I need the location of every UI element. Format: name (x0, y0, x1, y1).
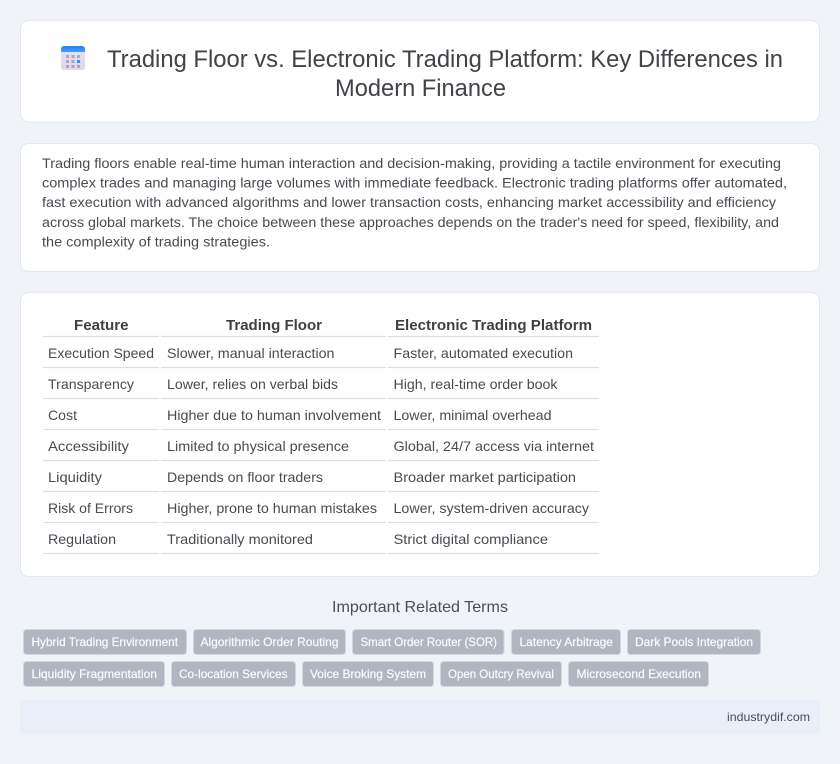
row: transparency (48, 376, 559, 392)
row: execution speed: Slower, manual interaction (167, 345, 334, 361)
row: cost (48, 407, 552, 423)
tag: Latency Arbitrage (520, 635, 613, 649)
row: regulation: Regulation (48, 531, 116, 547)
tag: Hybrid Trading Environment (32, 635, 179, 649)
row: transparency: Transparency (48, 376, 134, 392)
tag (568, 662, 708, 686)
row: accessibility (48, 438, 594, 454)
tag (628, 630, 760, 654)
row: liquidity: Liquidity (48, 469, 102, 485)
tag: Microsecond Execution (576, 667, 701, 681)
row: execution speed: Execution Speed (48, 345, 154, 361)
panel: summary (20, 144, 820, 272)
tag (440, 662, 562, 686)
tag: Smart Order Router (SOR) (360, 635, 497, 649)
title: Modern Finance (335, 75, 506, 102)
summary text (42, 155, 787, 249)
row: liquidity: Broader market participation (394, 469, 576, 485)
title (107, 46, 783, 102)
table header: Electronic Trading Platform (395, 318, 592, 334)
heading: related terms: Important Related Terms (332, 599, 508, 616)
tag (194, 630, 346, 654)
tag (24, 662, 164, 686)
tag (172, 662, 296, 686)
summary text: the complexity of trading strategies. (42, 233, 270, 249)
tag: Algorithmic Order Routing (200, 635, 338, 649)
icon: calendar (61, 46, 85, 70)
row: transparency: High, real-time order book (394, 376, 559, 392)
tag: Dark Pools Integration (635, 635, 753, 649)
footer (20, 700, 820, 734)
panel: header (20, 20, 820, 122)
row: risk of errors (48, 500, 589, 516)
tag: Open Outcry Revival (448, 667, 554, 681)
row: liquidity (48, 469, 576, 485)
summary text: complex trades and managing large volumes with immediate feedback. Electronic trading platforms offer automated, (42, 175, 787, 191)
panel: comparison table (20, 292, 820, 576)
row: cost: Lower, minimal overhead (394, 407, 552, 423)
row: cost: Higher due to human involvement (167, 407, 381, 423)
row: accessibility: Limited to physical presence (167, 438, 349, 454)
row: cost: Cost (48, 407, 77, 423)
row: risk of errors: Lower, system-driven accuracy (394, 500, 589, 516)
tag: Voice Broking System (310, 667, 426, 681)
footer: industrydif.com (727, 710, 810, 724)
title: Trading Floor vs. Electronic Trading Platform: Key Differences in (107, 46, 783, 73)
row: transparency: Lower, relies on verbal bids (167, 376, 338, 392)
row: execution speed: Faster, automated execution (394, 345, 573, 361)
tag (24, 630, 186, 654)
row: regulation: Traditionally monitored (167, 531, 313, 547)
tag (352, 630, 504, 654)
tags: related terms (24, 630, 760, 686)
table header: Trading Floor (226, 318, 322, 334)
tag: Liquidity Fragmentation (32, 667, 157, 681)
summary text: across global markets. The choice between these approaches depends on the trader's need for speed, flexibility, and (42, 214, 779, 230)
tag (512, 630, 620, 654)
summary text: Trading floors enable real-time human interaction and decision-making, providing a tactile environment for executing (42, 155, 781, 171)
row: accessibility: Global, 24/7 access via internet (394, 438, 594, 454)
tag (302, 662, 434, 686)
summary text: fast execution with advanced algorithms and lower transaction costs, enhancing market accessibility and efficiency (42, 194, 776, 210)
tag: Co-location Services (179, 667, 288, 681)
row: liquidity: Depends on floor traders (167, 469, 323, 485)
row: risk of errors: Higher, prone to human mistakes (167, 500, 377, 516)
table header: Feature (74, 318, 128, 334)
row: regulation: Strict digital compliance (394, 531, 548, 547)
row: accessibility: Accessibility (48, 438, 129, 454)
row: execution speed (48, 345, 573, 361)
table header (74, 318, 592, 334)
row: risk of errors: Risk of Errors (48, 500, 133, 516)
row: regulation (48, 531, 548, 547)
